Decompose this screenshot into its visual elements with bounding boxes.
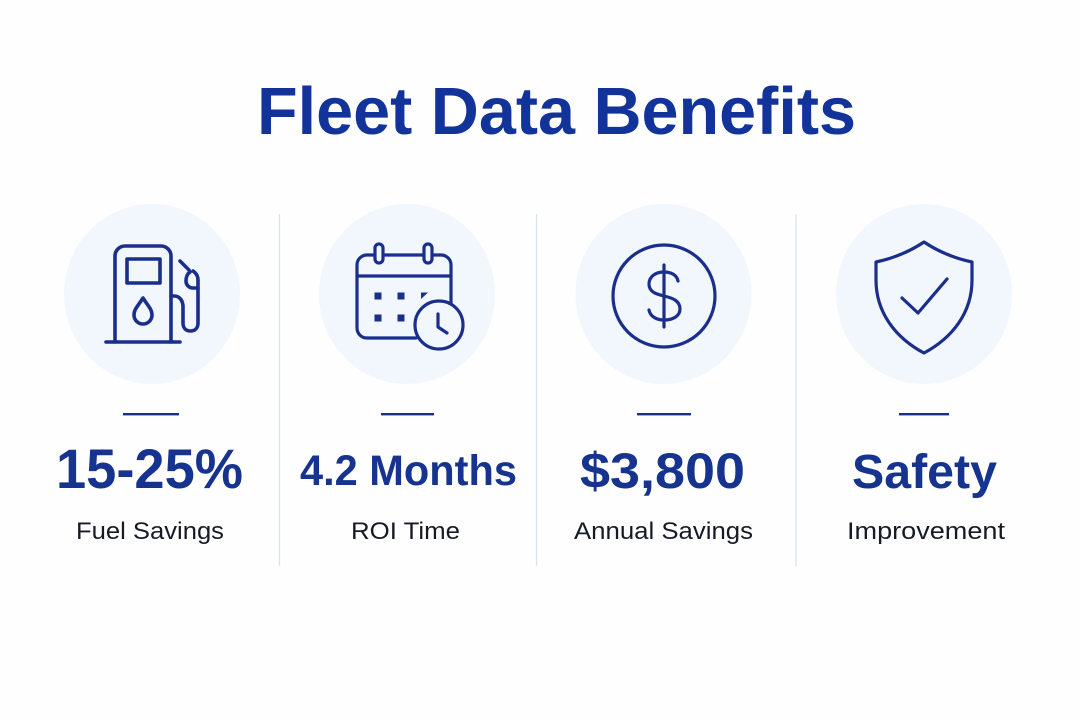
stat value: 15-25%	[56, 437, 243, 500]
panel: safety improvement	[836, 204, 1012, 545]
accent line	[637, 413, 691, 415]
icon: dollar coin	[576, 204, 752, 384]
panel: annual savings	[574, 204, 753, 545]
stat value: $3,800	[580, 443, 745, 499]
panel: roi time	[300, 204, 517, 545]
title: Fleet Data Benefits	[257, 74, 856, 149]
stat value: Safety	[852, 446, 997, 499]
icon: fuel pump	[64, 204, 240, 384]
stat label: Annual Savings	[574, 518, 753, 545]
stat value: 4.2 Months	[300, 447, 517, 495]
icon: shield with check	[836, 204, 1012, 384]
icon: calendar with clock	[319, 204, 495, 384]
accent line	[123, 413, 179, 415]
stat label: Fuel Savings	[76, 518, 224, 545]
stat label: Improvement	[847, 518, 1005, 545]
stat label: ROI Time	[351, 518, 460, 545]
accent line	[899, 413, 949, 415]
accent line	[381, 413, 434, 415]
panel: fuel savings	[56, 204, 243, 545]
